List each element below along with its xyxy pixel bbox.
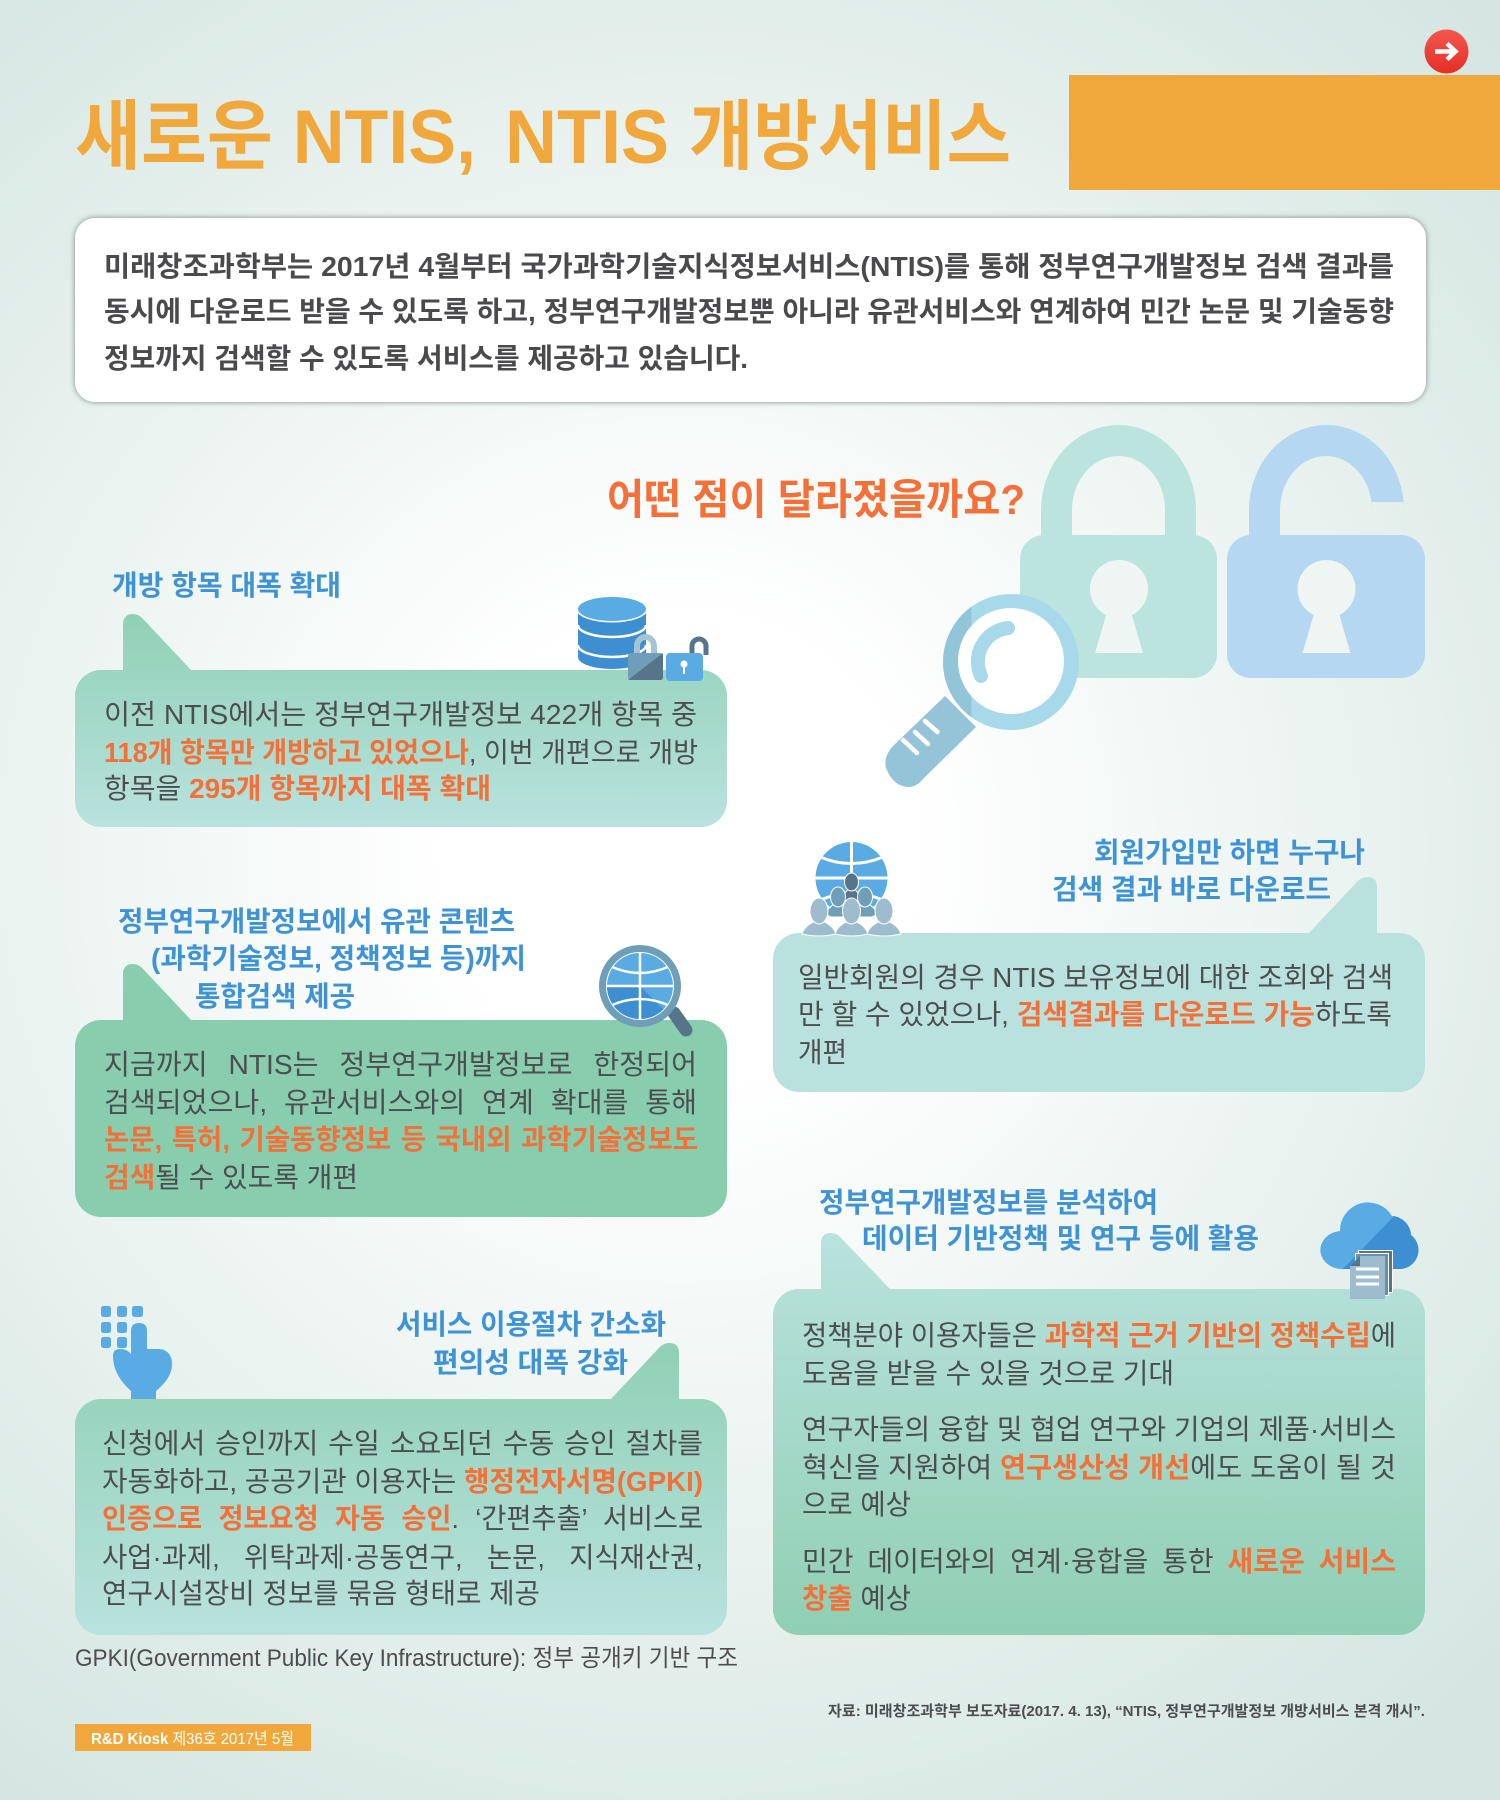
panel text bbox=[104, 699, 698, 804]
panel text: 이전 NTIS에서는 정부연구개발정보 422개 항목 중 bbox=[104, 699, 697, 730]
icon: database with padlocks bbox=[578, 597, 706, 681]
icon: closed padlock bbox=[1020, 425, 1217, 678]
source note: 자료: 미래창조과학부 보도자료(2017. 4. 13), “NTIS, 정부연구개발정보 개방서비스 본격 개시”. bbox=[828, 1703, 1425, 1720]
title: NTIS bbox=[505, 95, 669, 180]
heading: data-based policy: 데이터 기반정책 및 연구 등에 활용 bbox=[862, 1223, 1259, 1254]
icon: globe with people bbox=[802, 840, 901, 936]
heading: integrated search: (과학기술정보, 정책정보 등)까지 bbox=[151, 943, 526, 974]
heading: what changed: 어떤 점이 달라졌을까요? bbox=[607, 476, 1025, 523]
panel: simplified procedure bbox=[75, 1343, 727, 1635]
title: 새로운 NTIS, bbox=[75, 95, 476, 180]
heading: download for members bbox=[1052, 837, 1365, 905]
panel text: 검색되었으나, 유관서비스와의 연계 확대를 통해 bbox=[104, 1087, 697, 1118]
panel: introduction bbox=[75, 218, 1426, 402]
panel text: 연구자들의 융합 및 협업 연구와 기업의 제품·서비스 bbox=[802, 1414, 1396, 1445]
heading: open items expanded: 개방 항목 대폭 확대 bbox=[112, 570, 341, 601]
title: 개방서비스 bbox=[689, 95, 1011, 180]
heading: data-based policy: 정부연구개발정보를 분석하여 bbox=[819, 1187, 1158, 1218]
icon: red arrow button bbox=[1424, 30, 1468, 74]
panel text: 지금까지 NTIS는 정부연구개발정보로 한정되어 bbox=[104, 1049, 697, 1080]
panel text: 민간 데이터와의 연계·융합을 통한 새로운 서비스 bbox=[802, 1546, 1396, 1577]
intro text: 정보까지 검색할 수 있도록 서비스를 제공하고 있습니다. bbox=[104, 343, 748, 374]
panel text: 사업·과제, 위탁과제·공동연구, 논문, 지식재산권, bbox=[102, 1542, 703, 1573]
panel text: 118개 항목만 개방하고 있었으나, 이번 개편으로 개방 bbox=[104, 737, 698, 768]
panel: data-based policy bbox=[773, 1233, 1425, 1635]
panel text: 일반회원의 경우 NTIS 보유정보에 대한 조회와 검색 bbox=[798, 962, 1393, 993]
icon: large magnifier bbox=[885, 594, 1079, 787]
panel text: 자동화하고, 공공기관 이용자는 행정전자서명(GPKI) bbox=[102, 1466, 703, 1497]
panel text: 정책분야 이용자들은 과학적 근거 기반의 정책수립에 bbox=[802, 1320, 1396, 1351]
panel: open items expanded bbox=[75, 614, 727, 827]
intro text: 미래창조과학부는 2017년 4월부터 국가과학기술지식정보서비스(NTIS)를 통해 정부연구개발정보 검색 결과를 bbox=[104, 251, 1394, 282]
icon: globe magnifier bbox=[599, 945, 686, 1030]
icon: cloud with documents bbox=[1320, 1202, 1425, 1299]
panel: integrated search bbox=[75, 964, 727, 1217]
panel text: 인증으로 정보요청 자동 승인. ‘간편추출’ 서비스로 bbox=[102, 1503, 703, 1534]
panel: download for members bbox=[773, 877, 1425, 1092]
panel text bbox=[102, 1428, 703, 1609]
panel text: 개편 bbox=[798, 1037, 847, 1068]
intro text: 동시에 다운로드 받을 수 있도록 하고, 정부연구개발정보뿐 아니라 유관서비스와 연계하여 민간 논문 및 기술동향 bbox=[104, 296, 1394, 327]
panel text: 신청에서 승인까지 수일 소요되던 수동 승인 절차를 bbox=[102, 1428, 703, 1459]
panel text bbox=[798, 962, 1393, 1068]
icon: open padlock bbox=[1227, 425, 1425, 678]
panel text: 혁신을 지원하여 연구생산성 개선에도 도움이 될 것 bbox=[802, 1452, 1396, 1483]
heading: data-based policy bbox=[819, 1187, 1259, 1254]
heading: integrated search: 정부연구개발정보에서 유관 콘텐츠 bbox=[118, 906, 515, 937]
badge: issue label bbox=[75, 1724, 311, 1751]
panel text bbox=[104, 1049, 698, 1193]
heading: simplified procedure: 편의성 대폭 강화 bbox=[433, 1347, 628, 1378]
panel text: 논문, 특허, 기술동향정보 등 국내외 과학기술정보도 bbox=[104, 1124, 698, 1155]
panel text: 도움을 받을 수 있을 것으로 기대 bbox=[802, 1358, 1174, 1389]
panel text: 연구시설장비 정보를 묶음 형태로 제공 bbox=[102, 1578, 540, 1609]
badge: issue label: R&D Kiosk 제36호 2017년 5월 bbox=[91, 1730, 294, 1748]
heading: download for members: 검색 결과 바로 다운로드 bbox=[1052, 874, 1331, 905]
panel text: 으로 예상 bbox=[802, 1489, 911, 1520]
intro text bbox=[104, 251, 1394, 374]
footnote: GPKI: GPKI(Government Public Key Infrastructure): 정부 공개키 기반 구조 bbox=[75, 1645, 738, 1672]
heading: integrated search: 통합검색 제공 bbox=[195, 981, 355, 1012]
heading: simplified procedure: 서비스 이용절차 간소화 bbox=[396, 1309, 666, 1340]
icon: hand tapping keypad bbox=[101, 1306, 172, 1400]
panel text bbox=[802, 1320, 1396, 1614]
panel text: 항목을 295개 항목까지 대폭 확대 bbox=[104, 773, 491, 804]
orange title banner bbox=[1069, 75, 1500, 190]
heading: simplified procedure bbox=[396, 1309, 666, 1378]
panel text: 만 할 수 있었으나, 검색결과를 다운로드 가능하도록 bbox=[798, 999, 1392, 1030]
panel text: 검색될 수 있도록 개편 bbox=[104, 1162, 358, 1193]
panel text: 창출 예상 bbox=[802, 1583, 911, 1614]
heading: integrated search bbox=[118, 906, 526, 1012]
heading: download for members: 회원가입만 하면 누구나 bbox=[1094, 837, 1365, 868]
